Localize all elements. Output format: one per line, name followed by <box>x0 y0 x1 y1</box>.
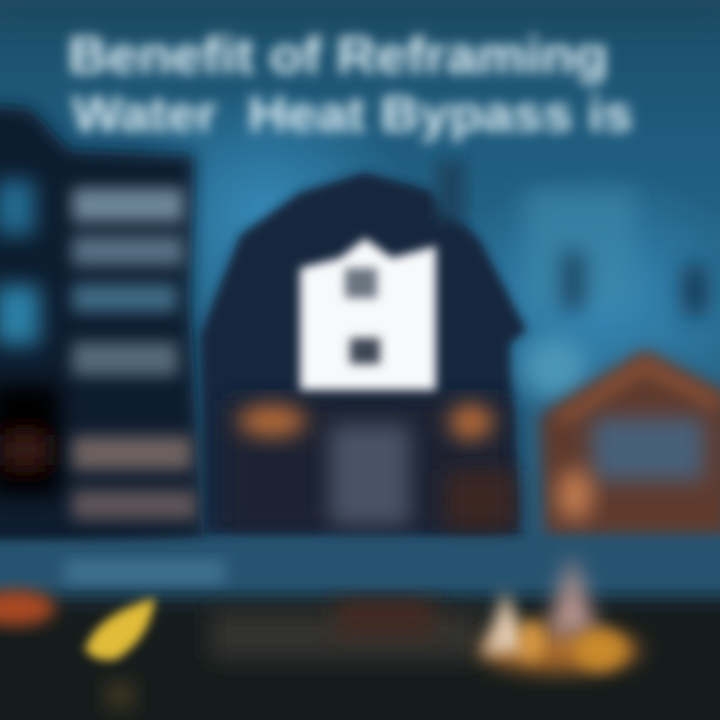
white window panel <box>300 238 436 390</box>
left building windows <box>0 180 60 495</box>
title: Water <box>72 86 217 142</box>
right brown house <box>540 350 720 535</box>
barn body <box>200 172 527 535</box>
chimney <box>436 160 466 220</box>
horizontal blue band <box>0 540 720 590</box>
dark ground <box>0 600 720 720</box>
orange lights <box>238 404 493 440</box>
left column text rows <box>72 188 197 520</box>
window glyphs <box>345 268 380 364</box>
central barn house <box>200 160 527 535</box>
title: Heat Bypass is <box>248 86 633 142</box>
window <box>592 418 704 480</box>
upper right faint panel <box>523 190 706 398</box>
ground labels <box>210 610 480 660</box>
campfire glow <box>480 555 640 672</box>
left dark building <box>0 105 205 560</box>
title: Benefit of Reframing <box>68 27 608 85</box>
orange left glow <box>0 590 55 626</box>
title <box>68 27 633 142</box>
brown lower right <box>445 470 515 530</box>
lower body shading <box>225 400 510 530</box>
warm highlight <box>557 469 593 521</box>
yellow flame icon <box>85 598 155 709</box>
central door <box>330 425 410 525</box>
